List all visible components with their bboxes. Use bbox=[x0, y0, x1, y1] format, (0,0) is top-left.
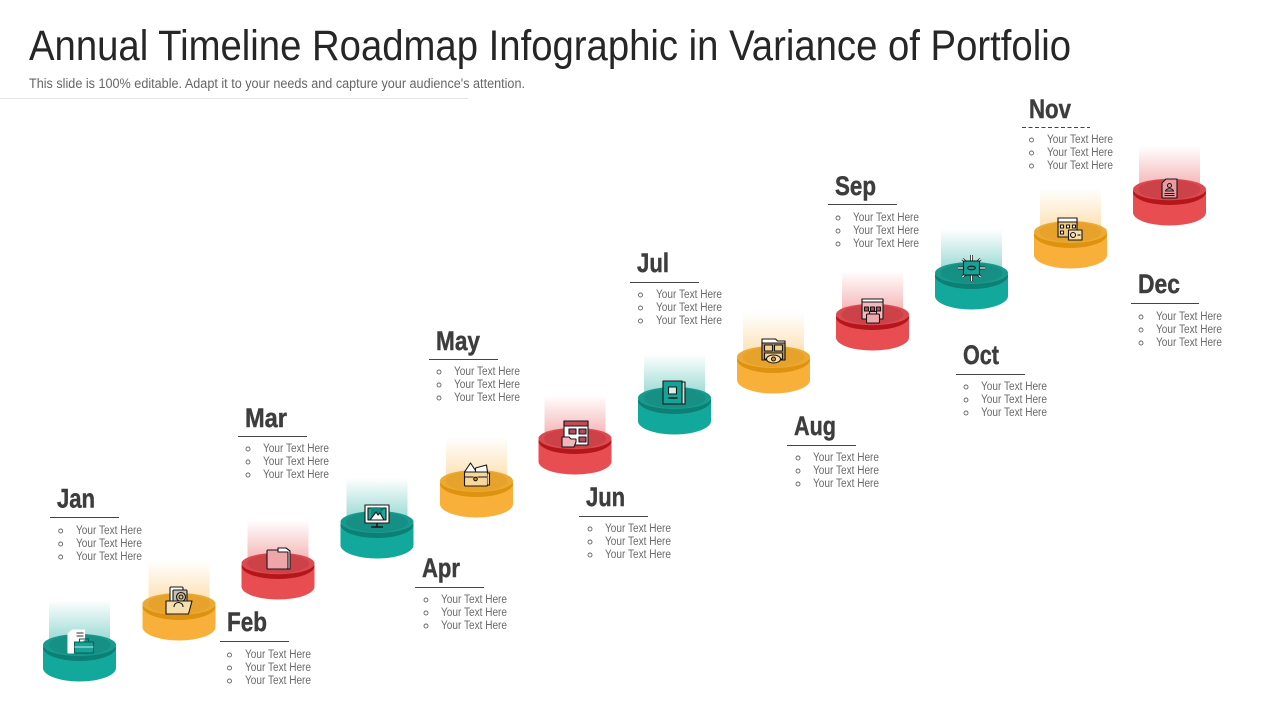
label: Mar: Your Text Here bbox=[263, 443, 329, 455]
label: Feb: Your Text Here bbox=[245, 675, 311, 687]
label: Aug: Aug bbox=[794, 411, 836, 441]
puck: November bbox=[1034, 188, 1107, 268]
puck: September bbox=[836, 271, 909, 350]
label: Sep: Sep bbox=[835, 171, 876, 201]
puck: May bbox=[440, 437, 513, 518]
label: Aug: Your Text Here bbox=[813, 465, 879, 477]
label: Sep: Your Text Here bbox=[853, 225, 919, 237]
label: Feb: Your Text Here bbox=[245, 662, 311, 674]
label: Aug: Your Text Here bbox=[813, 478, 879, 490]
label: Mar bbox=[238, 403, 329, 481]
label: Jul: Your Text Here bbox=[656, 289, 722, 301]
label: Jul: Jul bbox=[637, 248, 669, 278]
puck: July bbox=[638, 354, 711, 434]
label: Jul bbox=[630, 248, 722, 327]
label: Oct: Oct bbox=[963, 340, 999, 370]
label: Sep: Your Text Here bbox=[853, 212, 919, 224]
label: Oct bbox=[956, 340, 1047, 419]
label: Oct: Your Text Here bbox=[981, 407, 1047, 419]
label: Dec: Your Text Here bbox=[1156, 324, 1222, 336]
label: Dec: Dec bbox=[1138, 269, 1180, 299]
label: Jan bbox=[50, 484, 142, 563]
label: May: Your Text Here bbox=[454, 366, 520, 378]
icon: folder with document bbox=[166, 587, 192, 614]
puck: March bbox=[242, 520, 314, 600]
icon: profile document bbox=[1162, 179, 1177, 198]
label: Oct: Your Text Here bbox=[981, 381, 1047, 393]
icon: folder with eye bbox=[762, 339, 785, 363]
puck: December bbox=[1133, 146, 1206, 226]
label: Jan: Your Text Here bbox=[76, 551, 142, 563]
icon: circuit chip bbox=[958, 255, 985, 281]
label: Dec: Your Text Here bbox=[1156, 337, 1222, 349]
icon: window with briefcase bbox=[862, 299, 883, 323]
label: Dec bbox=[1131, 269, 1222, 349]
label: Apr bbox=[415, 553, 507, 632]
icon: wallet bbox=[464, 463, 490, 486]
label: Jun: Jun bbox=[586, 482, 625, 512]
label: Mar: Mar bbox=[245, 403, 287, 433]
label: May: Your Text Here bbox=[454, 392, 520, 404]
icon: calendar with card bbox=[1058, 218, 1082, 240]
label: Feb: Your Text Here bbox=[245, 649, 311, 661]
label: Mar: Your Text Here bbox=[263, 469, 329, 481]
label: Apr: Your Text Here bbox=[441, 607, 507, 619]
label: Aug: Your Text Here bbox=[813, 452, 879, 464]
puck: January bbox=[43, 600, 116, 682]
label: Feb bbox=[220, 607, 311, 687]
icon: file folder bbox=[267, 548, 290, 569]
subtitle: This slide is 100% editable. Adapt it to your needs and capture your audience's attention. bbox=[29, 76, 525, 91]
label: Jan: Jan bbox=[57, 484, 95, 514]
puck: October bbox=[935, 229, 1008, 310]
label: Jun: Your Text Here bbox=[605, 523, 671, 535]
puck: April bbox=[340, 478, 414, 558]
icon: notebook bbox=[663, 381, 685, 404]
label: Nov: Your Text Here bbox=[1047, 147, 1113, 159]
puck: August bbox=[737, 313, 810, 394]
label: Nov: Your Text Here bbox=[1047, 160, 1113, 172]
label: May: May bbox=[436, 326, 480, 356]
icon: document and briefcase bbox=[68, 630, 94, 653]
label: Nov bbox=[1022, 94, 1113, 172]
label: Jun: Your Text Here bbox=[605, 536, 671, 548]
label: Jul: Your Text Here bbox=[656, 315, 722, 327]
puck: June bbox=[538, 395, 612, 474]
icon: window with folder bbox=[562, 421, 588, 447]
label: Nov: Your Text Here bbox=[1047, 134, 1113, 146]
label: May: Your Text Here bbox=[454, 379, 520, 391]
label: Mar: Your Text Here bbox=[263, 456, 329, 468]
label: Jun: Your Text Here bbox=[605, 549, 671, 561]
label: Jan: Your Text Here bbox=[76, 538, 142, 550]
label: Apr: Your Text Here bbox=[441, 620, 507, 632]
label: Sep bbox=[828, 171, 919, 250]
label: Nov: Nov bbox=[1029, 94, 1071, 124]
label: Dec: Your Text Here bbox=[1156, 311, 1222, 323]
label: Jan: Your Text Here bbox=[76, 525, 142, 537]
label: May bbox=[429, 326, 520, 404]
label: Jul: Your Text Here bbox=[656, 302, 722, 314]
label: Jun bbox=[579, 482, 671, 561]
title: Annual Timeline Roadmap Infographic in Variance of Portfolio bbox=[29, 22, 1071, 70]
label: Aug bbox=[787, 411, 879, 490]
icon: monitor with picture bbox=[365, 505, 389, 527]
label: Apr: Your Text Here bbox=[441, 594, 507, 606]
label: Oct: Your Text Here bbox=[981, 394, 1047, 406]
puck: February bbox=[142, 560, 216, 640]
label: Apr: Apr bbox=[422, 553, 460, 583]
label: Feb: Feb bbox=[227, 607, 267, 637]
label: Sep: Your Text Here bbox=[853, 238, 919, 250]
